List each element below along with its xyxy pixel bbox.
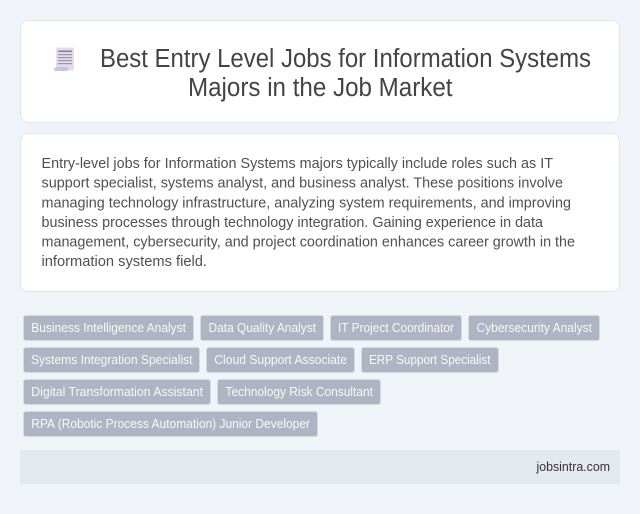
tag: Cloud Support Associate: Cloud Support Associate [214,352,347,367]
tag: RPA Junior Developer: RPA (Robotic Process Automation) Junior Developer [31,416,311,431]
title [100,45,591,102]
tag: Technology Risk Consultant: Technology Risk Consultant [226,384,373,399]
tag: Systems Integration Specialist [24,348,200,372]
text block: description: support specialist, systems analyst, and business analyst. These positions involve [42,174,563,192]
tag: Data Quality Analyst: Data Quality Analyst [208,320,316,335]
tag: Business Intelligence Analyst: Business Intelligence Analyst [31,320,186,335]
icon: document scroll [54,48,74,71]
tag: Cybersecurity Analyst [468,316,600,340]
title: Best Entry Level Jobs for Information Systems [100,45,591,73]
tag: Cloud Support Associate [206,348,354,372]
tag: Digital Transformation Assistant: Digital Transformation Assistant [31,384,203,399]
tags: job roles [24,316,600,436]
tag: RPA Junior Developer [24,412,318,436]
tag: Technology Risk Consultant [218,380,380,404]
tag: IT Project Coordinator: IT Project Coordinator [338,320,455,335]
tag: Business Intelligence Analyst [24,316,194,340]
panel: header card [20,20,620,122]
tag: Data Quality Analyst [200,316,324,340]
text block: description: management, cybersecurity, and project coordination enhances career growth in the [42,234,575,250]
tag: Digital Transformation Assistant [24,380,210,404]
footer bar [20,450,620,484]
tag: Cybersecurity Analyst: Cybersecurity Analyst [476,320,592,335]
panel: description card [20,134,620,292]
text block: description: managing technology infrastructure, analyzing system requirements, and improving [42,194,571,212]
tag: IT Project Coordinator [330,316,462,340]
tag: ERP Support Specialist: ERP Support Specialist [369,352,491,367]
text block: description [42,155,575,270]
text block: description: information systems field. [42,253,207,270]
tag: Systems Integration Specialist: Systems Integration Specialist [31,352,193,367]
footer source text: jobsintra.com [536,459,610,474]
title: Majors in the Job Market [188,74,452,102]
text block: description: Entry-level jobs for Information Systems majors typically include roles such as IT [42,155,553,172]
tag: ERP Support Specialist [362,348,498,372]
text block: description: business processes through technology integration. Gaining experience in data [42,214,544,231]
